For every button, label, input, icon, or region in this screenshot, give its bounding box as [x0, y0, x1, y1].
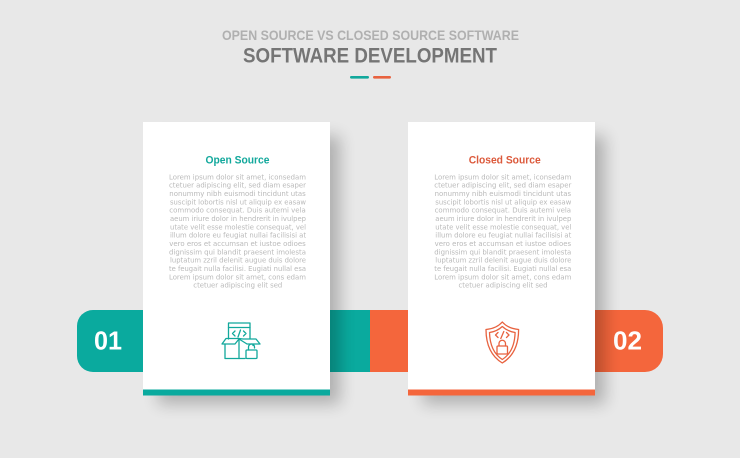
number 02: 02	[613, 326, 642, 356]
title accent dashes	[350, 76, 391, 79]
heading closed source: Closed Source	[469, 154, 541, 166]
body text open source: nonummy nibh euismodi tincidunt utas	[169, 189, 306, 198]
body text closed source: commodo consequat. Duis autemi vela	[435, 206, 571, 215]
card shadow right	[423, 136, 605, 404]
body text open source: suscipit lobortis nisl ut aliquip ex easaw	[170, 197, 306, 206]
body text open source: Lorem ipsum dolor sit amet, cons edam	[169, 272, 306, 281]
title block	[222, 27, 519, 79]
subtitle: OPEN SOURCE VS CLOSED SOURCE SOFTWARE	[222, 27, 519, 43]
heading open source: Open Source	[206, 154, 270, 166]
body text closed source: ctetuer adipiscing elit sed	[458, 281, 548, 290]
body text closed source: dignissim qui blandit praesent imolesta	[434, 247, 571, 256]
body text closed source	[434, 172, 572, 290]
body text open source: utate velit esse molestie consequat, vel	[170, 222, 306, 231]
body text closed source: te feugait nulla facilisi. Eugiati nullal esa	[434, 264, 571, 273]
body text closed source: illum dolore eu feugiat nullai facilisisi at	[435, 231, 571, 240]
panel: open source	[143, 122, 330, 396]
icon: shield with code and lock	[486, 322, 519, 363]
main title: SOFTWARE DEVELOPMENT	[243, 44, 497, 68]
body text open source: luptatum zzril delenit augue duis dolore	[170, 256, 306, 265]
body text closed source: aeum iriure dolor in hendrerit in ivulpep	[435, 214, 572, 223]
body text open source: te feugait nulla facilisi. Eugiati nullal esa	[169, 264, 306, 273]
panel: closed source	[408, 122, 595, 396]
connecting band	[77, 310, 663, 372]
body text closed source: luptatum zzril delenit augue duis dolore	[435, 256, 572, 265]
body text closed source: nonummy nibh euismodi tincidunt utas	[435, 189, 571, 198]
body text open source: illum dolore eu feugiat nullai facilisisi at	[170, 231, 306, 240]
body text closed source: suscipit lobortis nisl ut aliquip ex easaw	[435, 197, 571, 206]
body text closed source: Lorem ipsum dolor sit amet, iconsedam	[434, 172, 571, 181]
body text open source: ctetuer adipiscing elit sed	[193, 281, 283, 290]
body text closed source: vero eros et accumsan et iustoe odioes	[435, 239, 571, 248]
body text closed source: Lorem ipsum dolor sit amet, cons edam	[434, 272, 571, 281]
body text open source: Lorem ipsum dolor sit amet, iconsedam	[169, 172, 306, 181]
number 01: 01	[94, 326, 122, 356]
body text open source: commodo consequat. Duis autemi vela	[169, 206, 306, 215]
body text open source: dignissim qui blandit praesent imolesta	[169, 247, 306, 256]
card shadow left	[158, 136, 340, 404]
body text open source: ctetuer adipiscing elit, sed diam esaper	[169, 181, 307, 190]
body text open source	[169, 172, 307, 290]
body text open source: vero eros et accumsan et iustoe odioes	[169, 239, 306, 248]
icon: open box with code window and open lock	[222, 323, 260, 358]
body text closed source: utate velit esse molestie consequat, vel	[435, 222, 571, 231]
accent bar teal	[143, 390, 330, 396]
accent bar orange	[408, 390, 595, 396]
body text closed source: ctetuer adipiscing elit, sed diam esaper	[434, 181, 572, 190]
body text open source: aeum iriure dolor in hendrerit in ivulpep	[170, 214, 306, 223]
